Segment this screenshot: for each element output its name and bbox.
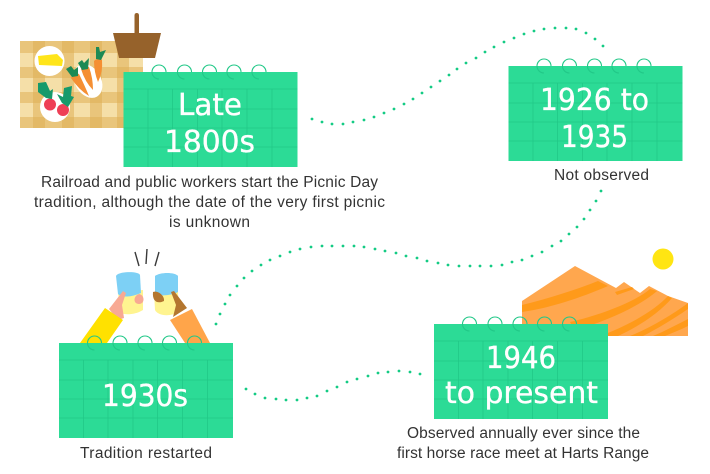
plate with cheese <box>34 46 64 76</box>
illustration: picnic blanket and basket <box>20 13 161 128</box>
caption: late 1800s <box>34 174 385 231</box>
cheers lines <box>135 249 159 266</box>
calendar: 1930s <box>59 336 233 438</box>
caption: late 1800s: Railroad and public workers start the Picnic Day <box>41 174 378 191</box>
calendar: late 1800s: 1800s <box>164 125 255 160</box>
calendar: 1926 to 1935 <box>508 59 682 161</box>
calendar: late 1800s <box>124 65 298 167</box>
caption: 1930s: Tradition restarted <box>80 445 212 462</box>
caption: 1946 to present: Observed annually ever since the <box>407 425 640 442</box>
plate with radishes <box>38 82 74 122</box>
right glass and arm <box>153 273 210 343</box>
sun <box>652 248 674 270</box>
calendar: 1946 to present <box>434 317 608 419</box>
calendar: late 1800s: Late <box>178 88 242 123</box>
basket <box>113 13 161 58</box>
caption: 1946 to present: first horse race meet at Harts Range <box>397 445 649 462</box>
left glass and arm <box>80 272 144 343</box>
mountain stripes <box>522 281 688 336</box>
calendar: 1946 to present: to present <box>445 376 598 411</box>
caption: late 1800s: is unknown <box>169 214 250 231</box>
mountains <box>522 266 688 336</box>
calendar: 1930s: 1930s <box>102 379 188 414</box>
dotted path: 1926 to 1930s <box>215 190 602 325</box>
calendar: 1926 to 1935: 1935 <box>561 120 628 155</box>
illustration: clinking glasses <box>80 249 210 343</box>
calendar: 1926 to 1935: 1926 to <box>540 83 649 118</box>
dotted path: 1930s to 1946 <box>245 370 421 401</box>
caption: late 1800s: tradition, although the date of the very first picnic <box>34 194 385 211</box>
picnic blanket <box>20 41 143 128</box>
plate with carrots <box>66 47 108 103</box>
illustration: desert mountains and sun <box>522 248 688 336</box>
dotted path: late 1800s to 1926 <box>311 27 604 125</box>
caption: 1926 to 1935: Not observed <box>554 167 649 184</box>
caption: 1946 to present <box>397 425 649 462</box>
calendar: 1946 to present: 1946 <box>486 341 556 376</box>
